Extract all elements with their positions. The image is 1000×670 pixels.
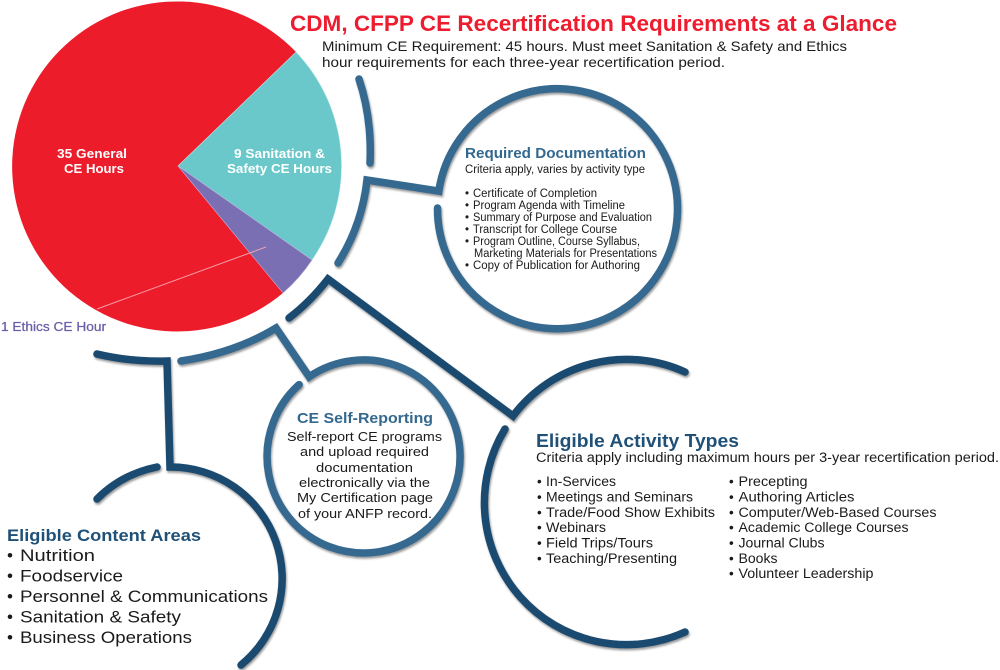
pie label: general: 35 General [57, 146, 127, 161]
content areas list [7, 546, 268, 647]
documentation list: Transcript for College Course [473, 224, 617, 236]
pie label: sanitation: 9 Sanitation & [234, 146, 325, 161]
content areas list: Nutrition [20, 546, 95, 565]
activity list: column 2: • [729, 536, 734, 550]
activity list: column 2: • [729, 551, 734, 566]
activity list: column 1: • [537, 505, 542, 520]
content areas list: • [7, 608, 13, 626]
activity list: column 2: Books [738, 551, 778, 566]
documentation list: • [465, 236, 469, 248]
activity list: column 2: Precepting [738, 474, 808, 489]
activity list: column 2: Academic College Courses [738, 520, 909, 535]
activity list: column 2 [729, 474, 937, 581]
heading: CE self-reporting: CE Self-Reporting [297, 410, 433, 427]
content areas list: • [7, 546, 13, 565]
title: CDM, CFPP CE Recertification Requirements at a Glance [290, 11, 897, 36]
documentation list [465, 188, 657, 272]
connector arc: upper right of pie [359, 79, 370, 163]
pie label: general [57, 146, 127, 176]
pie slice: 1 ethics hour [178, 166, 312, 293]
heading: activity types: Eligible Activity Types [536, 431, 739, 451]
activity list: column 1: • [537, 551, 542, 566]
activity list: column 1: Field Trips/Tours [546, 536, 653, 550]
activity list: column 1: Teaching/Presenting [546, 551, 677, 566]
self-reporting body [287, 429, 443, 521]
content areas list: • [7, 566, 13, 586]
activity list: column 2: • [729, 490, 734, 504]
activity list: column 2: Authoring Articles [738, 490, 855, 504]
panel text: activity types [536, 431, 999, 581]
activity list: column 1: • [537, 520, 542, 535]
documentation list: Program Agenda with Timeline [473, 200, 625, 212]
panel ring: content areas [97, 354, 282, 665]
self-reporting body: and upload required [300, 444, 429, 459]
activity list: column 2: • [729, 474, 734, 489]
content areas list: Sanitation & Safety [20, 608, 182, 626]
panel ring: activity types [289, 279, 685, 645]
panel text: content areas [7, 527, 268, 647]
documentation list: Marketing Materials for Presentations [474, 248, 657, 260]
activity list: column 2: • [729, 520, 734, 535]
intro text [322, 38, 847, 70]
documentation list: • [465, 224, 469, 236]
pie chart: CE hours [12, 1, 342, 331]
heading: content areas: Eligible Content Areas [7, 527, 201, 545]
content areas list: Personnel & Communications [20, 587, 268, 606]
content areas list: Business Operations [20, 628, 192, 647]
documentation list: • [465, 200, 469, 212]
documentation list: Copy of Publication for Authoring [473, 260, 640, 272]
intro text: hour requirements for each three-year recertification period. [322, 54, 725, 70]
pie slice: 35 general hours [12, 1, 296, 331]
pie label: sanitation [227, 146, 332, 176]
ethics leader line [97, 247, 266, 309]
activity list: column 1: Webinars [546, 520, 606, 535]
activity list: column 1: • [537, 474, 542, 489]
activity list: column 1: Trade/Food Show Exhibits [546, 505, 715, 520]
pie label: general: CE Hours [64, 161, 124, 176]
activity criteria note: Criteria apply including maximum hours per 3-year recertification period. [536, 450, 999, 465]
content areas list: • [7, 628, 13, 647]
panel ring: required documentation [338, 89, 677, 329]
activity list: column 1: • [537, 490, 542, 504]
panel text: required documentation [465, 145, 657, 272]
activity list: column 2: Volunteer Leadership [738, 566, 874, 581]
panel text: CE self-reporting [287, 410, 443, 521]
activity list: column 1: • [537, 536, 542, 550]
pie slice: 9 sanitation and safety hours [178, 52, 342, 260]
documentation list: • [465, 260, 469, 272]
intro text: Minimum CE Requirement: 45 hours. Must meet Sanitation & Safety and Ethics [322, 38, 847, 54]
documentation list: • [465, 212, 469, 224]
activity list: column 2: • [729, 505, 734, 520]
documentation list: Certificate of Completion [473, 188, 597, 200]
documentation list: • [465, 188, 469, 200]
documentation list: Program Outline, Course Syllabus, [473, 236, 640, 248]
documentation list: Summary of Purpose and Evaluation [473, 212, 652, 224]
self-reporting body: My Certification page [297, 490, 433, 505]
pie label: sanitation: Safety CE Hours [227, 161, 332, 176]
self-reporting body: electronically via the [299, 475, 430, 490]
heading: required documentation: Required Documentation [465, 145, 646, 162]
activity list: column 2: Journal Clubs [738, 536, 825, 550]
activity list: column 2: Computer/Web-Based Courses [738, 505, 937, 520]
activity list: column 1 [537, 474, 715, 566]
self-reporting body: Self-report CE programs [287, 429, 443, 444]
activity list: column 1: In-Services [546, 474, 616, 489]
self-reporting body: documentation [316, 460, 413, 475]
criteria note: Criteria apply, varies by activity type [465, 164, 645, 176]
panel ring: CE self-reporting [181, 328, 460, 553]
activity list: column 2: • [729, 566, 734, 581]
self-reporting body: of your ANFP record. [298, 506, 432, 521]
content areas list: • [7, 587, 13, 606]
ethics label: 1 Ethics CE Hour [1, 319, 107, 334]
content areas list: Foodservice [20, 566, 123, 586]
activity list: column 1: Meetings and Seminars [546, 490, 693, 504]
